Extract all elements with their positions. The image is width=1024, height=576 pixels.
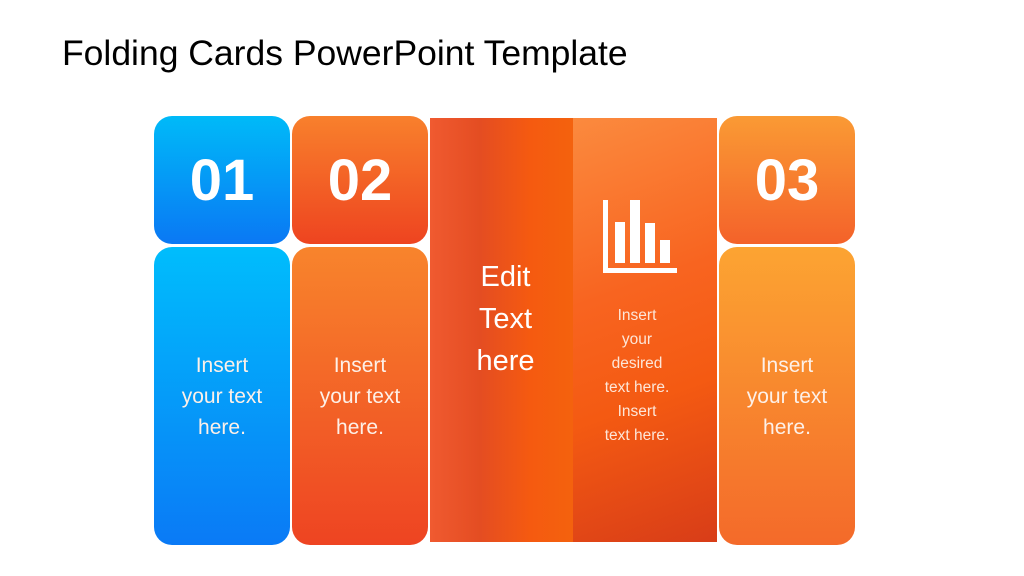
card 02 number [292,116,428,244]
card 03 body [719,247,855,545]
card 02 body: Insert [334,354,386,376]
text block: desired [612,355,662,372]
card 01 number: 01 [190,148,254,212]
card 01 number [154,116,290,244]
text block [604,307,669,444]
card 02 body [292,247,428,545]
text block: text here. [605,379,669,396]
center left panel: here [476,345,535,377]
card 03 body: here. [763,416,811,438]
card 01 body [154,247,290,545]
card 03 number: 03 [755,148,819,212]
text block: text here. [605,427,669,444]
text block: Insert [618,307,656,324]
card 03 number [719,116,855,244]
card 01 body: Insert [196,354,248,376]
card 02 number: 02 [328,148,392,212]
text block: your [622,331,652,348]
card 03 body: your text [747,384,827,408]
text block: Insert [618,403,656,420]
card 01 body: here. [198,416,246,438]
card 01 body: your text [182,384,262,408]
title: Folding Cards PowerPoint Template [62,33,628,73]
center left panel: Text [479,303,532,335]
card 02 body: your text [320,384,400,408]
card 03 body: Insert [761,354,813,376]
center right panel [573,118,717,542]
icon: bar chart [603,200,677,273]
card 02 body: here. [336,416,384,438]
center left panel: Edit [480,261,530,293]
center left panel [430,118,573,542]
